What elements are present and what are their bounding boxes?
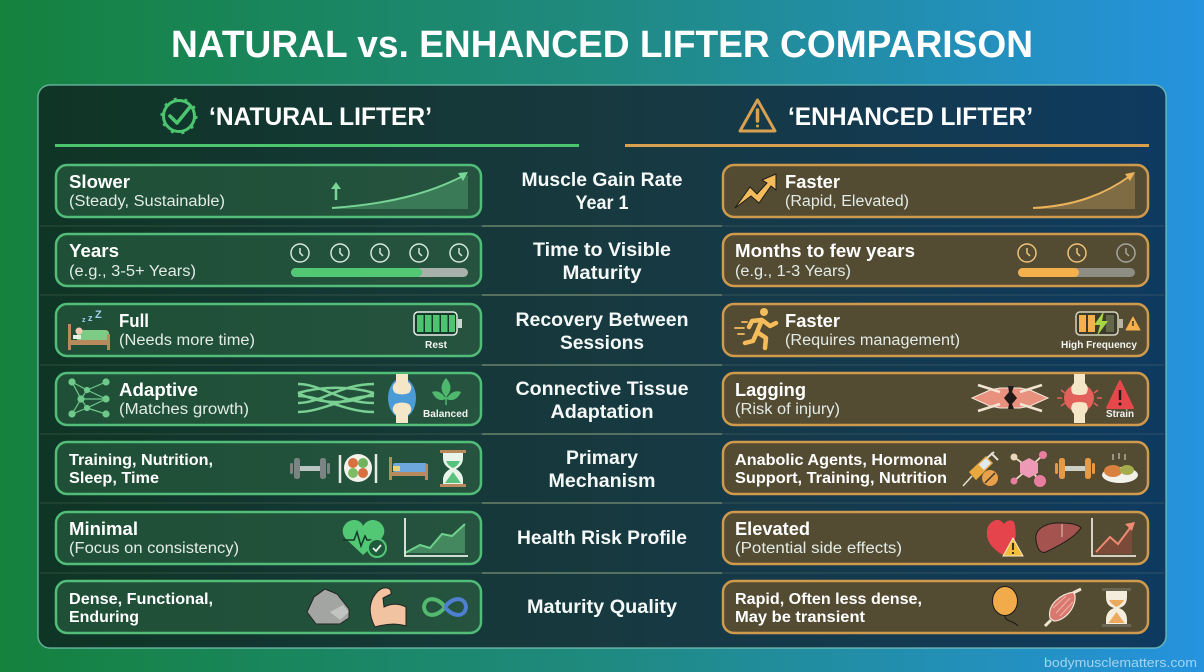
icon: steaming plate <box>1102 453 1138 483</box>
enhanced card: health risk: Elevated <box>735 519 810 539</box>
heading: natural lifter <box>55 98 579 147</box>
icon: small warning <box>1126 317 1140 330</box>
icon: orange dumbbell <box>1055 458 1095 479</box>
icon: hourglass <box>440 450 466 487</box>
enhanced card: connective tissue: Strain <box>1106 408 1134 420</box>
natural card: maturity quality: Enduring <box>69 609 139 626</box>
icon: inflamed joint <box>1057 374 1102 423</box>
icon: connective fibres <box>298 384 374 412</box>
enhanced card: recovery <box>723 304 1148 356</box>
natural card: recovery: Rest <box>425 339 447 351</box>
label: muscle gain rate: Year 1 <box>576 192 629 214</box>
icon: leaves <box>432 378 461 405</box>
natural card: connective tissue <box>56 373 481 425</box>
label: recovery between sessions <box>516 309 688 354</box>
natural card: maturity quality: Dense, Functional, <box>69 591 213 608</box>
label: primary mechanism <box>548 447 656 492</box>
label: time to visible maturity: Time to Visible <box>533 239 671 261</box>
icon: balloon <box>992 586 1018 626</box>
icon: zigzag arrow <box>735 174 776 208</box>
chart: steady growth curve <box>331 172 468 209</box>
enhanced card: maturity quality <box>723 581 1148 633</box>
natural card: muscle gain: (Steady, Sustainable) <box>69 193 225 210</box>
natural card: recovery: Full <box>119 311 149 331</box>
enhanced card: maturity quality: Rapid, Often less dense, <box>735 591 922 608</box>
icon: sleeping in bed: z <box>82 317 86 324</box>
natural card: health risk <box>56 512 481 564</box>
icon: network <box>69 379 109 417</box>
enhanced card: connective tissue: Lagging <box>735 380 806 400</box>
label: primary mechanism: Primary <box>566 447 638 469</box>
icon: warning triangle <box>740 100 775 131</box>
natural card: muscle gain: Slower <box>69 172 130 192</box>
panel: comparison table <box>38 85 1166 648</box>
heading: enhanced lifter <box>625 100 1149 147</box>
chart: stable health line <box>405 518 468 556</box>
icon: molecule <box>1010 451 1047 487</box>
icon: red warning <box>1107 381 1133 408</box>
enhanced card: muscle gain: Faster <box>785 172 840 192</box>
enhanced card: mechanism <box>723 442 1148 494</box>
row labels <box>516 169 689 618</box>
icon: bed <box>389 457 428 480</box>
label: maturity quality: Maturity Quality <box>527 596 677 618</box>
enhanced card: time to maturity: (e.g., 1-3 Years) <box>735 263 851 280</box>
icon: draining hourglass <box>1102 588 1131 627</box>
icon: heart with warning <box>987 520 1023 556</box>
icon: liver <box>1036 523 1081 552</box>
progress bar: years <box>291 268 468 277</box>
icon: plate of food <box>340 454 376 483</box>
heading: natural lifter: ‘NATURAL LIFTER’ <box>209 103 432 131</box>
icon: check badge <box>162 98 196 134</box>
chart: rapid growth curve <box>1033 172 1135 209</box>
enhanced card: mechanism: Support, Training, Nutrition <box>735 470 947 487</box>
icon: heart with check <box>343 520 386 557</box>
natural card: mechanism: Sleep, Time <box>69 470 159 487</box>
enhanced card: recovery: (Requires management) <box>785 332 960 349</box>
label: muscle gain rate <box>522 169 683 214</box>
label: connective tissue adaptation <box>516 378 689 423</box>
chart: rising health risk <box>1092 518 1136 556</box>
label: health risk profile: Health Risk Profile <box>517 527 687 549</box>
icon: infinity loop <box>424 599 466 615</box>
enhanced card: health risk <box>723 512 1148 564</box>
icon: muscle <box>1045 589 1081 626</box>
enhanced card: maturity quality: May be transient <box>735 609 865 626</box>
icon: sleeping in bed: z <box>88 313 93 323</box>
label: primary mechanism: Mechanism <box>548 470 656 492</box>
label: connective tissue adaptation: Adaptation <box>550 401 654 423</box>
enhanced card: connective tissue: (Risk of injury) <box>735 401 840 418</box>
label: recovery between sessions: Recovery Between <box>516 309 688 331</box>
label: recovery between sessions: Sessions <box>560 332 644 354</box>
icon: torn muscle <box>972 385 1048 411</box>
natural card: connective tissue: Balanced <box>423 408 468 420</box>
icon: five clocks <box>291 244 468 262</box>
enhanced card: recovery: Faster <box>785 311 840 331</box>
natural card: maturity quality <box>56 581 481 633</box>
enhanced card: connective tissue <box>723 373 1148 425</box>
icon: rock <box>307 589 349 624</box>
label: time to visible maturity: Maturity <box>562 262 642 284</box>
heading: enhanced lifter: ‘ENHANCED LIFTER’ <box>788 103 1033 131</box>
watermark: bodymusclematters.com <box>1044 655 1197 670</box>
enhanced card: time to maturity: Months to few years <box>735 241 915 261</box>
icon: healthy joint <box>388 374 416 423</box>
progress bar: months <box>1018 268 1135 277</box>
enhanced card: muscle gain <box>723 165 1148 217</box>
enhanced card: time to maturity <box>723 234 1148 286</box>
natural card: time to maturity <box>56 234 481 286</box>
natural card: health risk: Minimal <box>69 519 138 539</box>
icon: sleeping in bed: Z <box>95 309 102 321</box>
natural card: connective tissue: (Matches growth) <box>119 401 249 418</box>
label: connective tissue adaptation: Connective Tissue <box>516 378 689 400</box>
natural card: time to maturity: (e.g., 3-5+ Years) <box>69 263 196 280</box>
enhanced card: recovery: High Frequency <box>1061 339 1137 351</box>
enhanced card: health risk: (Potential side effects) <box>735 540 902 557</box>
icon: full battery <box>414 312 462 335</box>
enhanced card: mechanism: Anabolic Agents, Hormonal <box>735 452 947 469</box>
icon: flexed bicep <box>370 588 406 627</box>
enhanced card: muscle gain: (Rapid, Elevated) <box>785 193 909 210</box>
natural card: time to maturity: Years <box>69 241 119 261</box>
natural card: mechanism <box>56 442 481 494</box>
icon: runner <box>735 308 776 348</box>
natural card: recovery <box>56 304 481 356</box>
natural card: connective tissue: Adaptive <box>119 380 198 400</box>
icon: three clocks <box>1018 244 1135 262</box>
natural card: muscle gain <box>56 165 481 217</box>
icon: strained battery <box>1076 311 1123 336</box>
icon: syringe and pill <box>963 452 998 486</box>
natural card: health risk: (Focus on consistency) <box>69 540 239 557</box>
icon: sleeping in bed <box>68 309 110 350</box>
title: NATURAL vs. ENHANCED LIFTER COMPARISON <box>171 24 1033 66</box>
label: muscle gain rate: Muscle Gain Rate <box>522 169 683 191</box>
natural card: mechanism: Training, Nutrition, <box>69 452 213 469</box>
label: time to visible maturity <box>533 239 671 284</box>
icon: dumbbell <box>290 458 330 479</box>
natural card: recovery: (Needs more time) <box>119 332 255 349</box>
